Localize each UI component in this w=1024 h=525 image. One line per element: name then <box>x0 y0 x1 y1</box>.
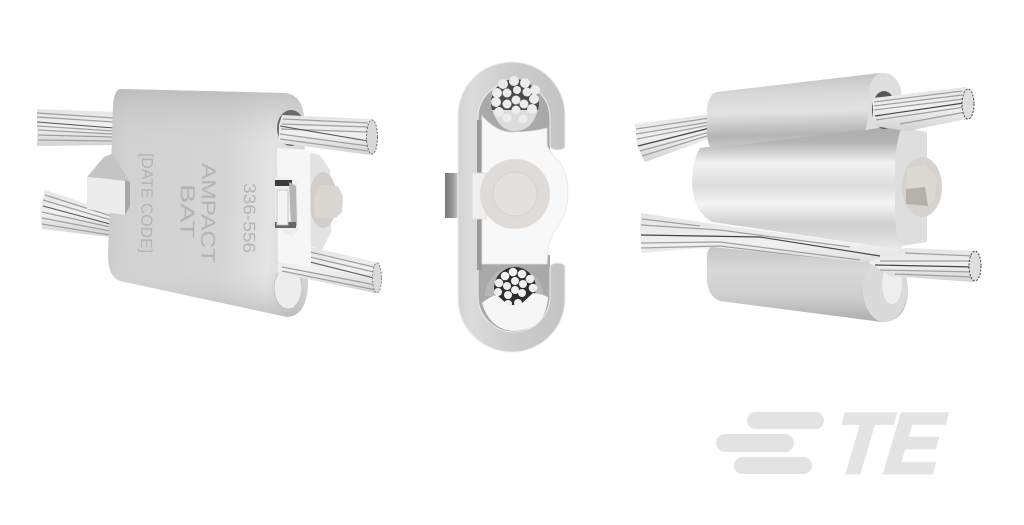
wire opening, upper <box>277 110 305 146</box>
logo bars <box>716 412 824 474</box>
bolt washer <box>309 172 337 228</box>
plate left gap <box>477 120 482 270</box>
small plate tab <box>472 173 486 219</box>
connector body <box>108 89 308 317</box>
white saddle plate <box>482 116 568 264</box>
cable: lower left end <box>40 190 112 237</box>
embossed text: date code: [DATE CODE] <box>137 153 155 253</box>
rear ear of bolt plate <box>309 152 331 250</box>
upper cable, right end <box>873 87 974 131</box>
cable: upper left end <box>37 109 116 146</box>
bolt hex head <box>314 185 343 218</box>
lower cylinder jaw <box>707 247 908 322</box>
logo wordmark: TE <box>830 396 949 492</box>
body top and bottom shading <box>108 89 308 317</box>
cable: upper right end <box>279 115 378 155</box>
upper cylinder jaw <box>707 73 902 148</box>
TE logo <box>716 396 949 492</box>
bolt hex head <box>493 172 537 216</box>
wire opening, lower <box>274 267 302 309</box>
white bolt plate <box>277 148 311 267</box>
embossed text: part number: 336-556 <box>239 183 259 253</box>
upper cavity <box>478 82 550 150</box>
cable: lower right end <box>278 247 382 293</box>
upper cable, left end <box>635 114 712 162</box>
lower white saddle <box>482 293 548 331</box>
bottom cable cross-section <box>485 267 543 309</box>
center view: end-on connector <box>445 62 568 352</box>
side tab <box>87 154 130 215</box>
bolt hex head <box>906 165 937 206</box>
C-shaped outer band <box>458 62 565 352</box>
right view: connector rear <box>635 73 981 322</box>
bolt washer <box>902 157 942 217</box>
side tab <box>445 173 458 218</box>
connector body <box>692 122 903 250</box>
lower cable <box>640 213 905 275</box>
top cable cross-section <box>491 76 540 131</box>
lower cavity <box>478 255 550 332</box>
lower cable, right end <box>868 248 981 282</box>
left view: connector with embossed markings <box>37 89 382 317</box>
embossed text: AMPACT: AMPACT <box>196 163 219 263</box>
embossed text: BAT: BAT <box>175 184 198 238</box>
bolt washer <box>480 159 550 229</box>
clip slot <box>275 177 298 237</box>
plate ear <box>888 125 927 248</box>
